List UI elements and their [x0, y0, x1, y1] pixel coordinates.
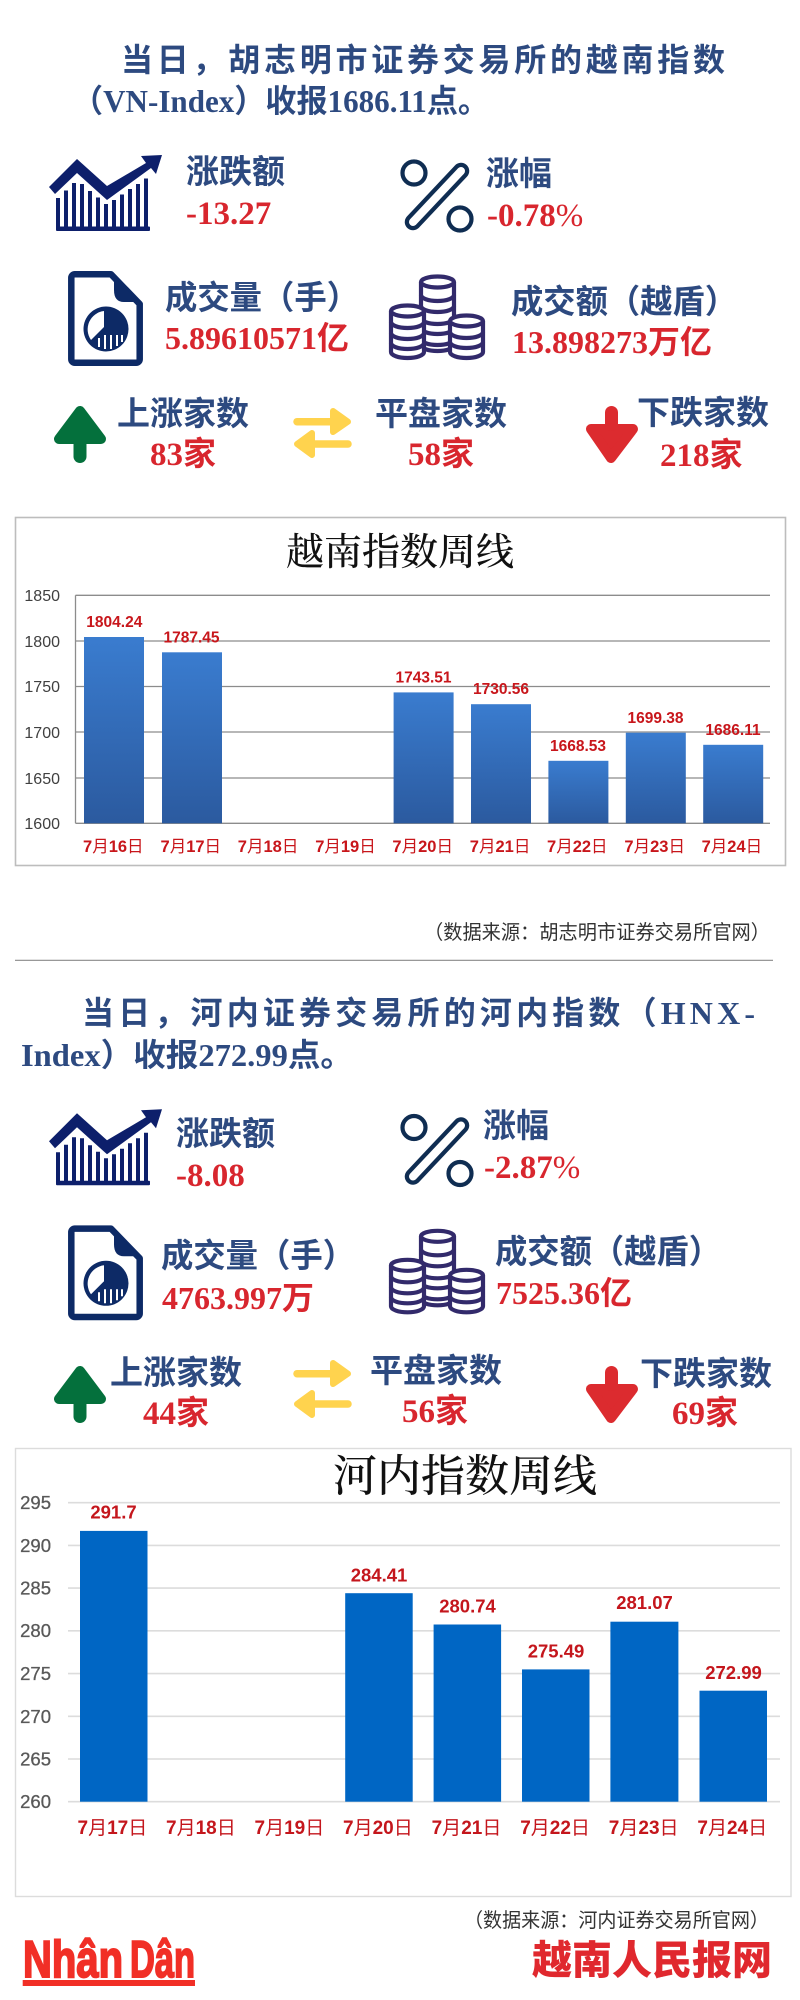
stat: turnover: 7525.36亿: [496, 1275, 632, 1311]
x axis date labels: 7月24日: [697, 1818, 767, 1839]
bar value labels: 284.41: [351, 1564, 407, 1586]
bar value labels: [90, 1502, 762, 1683]
bar value labels: 272.99: [705, 1662, 762, 1683]
y axis labels: 1700: [24, 725, 60, 742]
stat: change percent: 涨幅: [486, 156, 552, 193]
stat: advancing: [110, 1355, 242, 1432]
stat: volume: 4763.997万: [162, 1280, 314, 1316]
stat: change amount: 涨跌额: [176, 1116, 275, 1153]
source note: VN-Index: （数据来源：胡志明市证券交易所官网）: [424, 921, 770, 944]
x axis date labels: 7月22日: [547, 838, 608, 856]
icon: red down arrow: [591, 1366, 633, 1418]
bar value labels: 281.07: [616, 1592, 673, 1613]
section: VN-Index summary: [49, 42, 769, 474]
stat: change amount: 涨跌额: [186, 154, 285, 191]
x axis date labels: 7月23日: [624, 838, 685, 856]
logo: Nhan Dan: Dân: [130, 1931, 195, 1989]
stat: turnover: 成交额（越盾）: [495, 1234, 721, 1271]
icon: rising chart: [49, 155, 162, 231]
stat: change percent: [486, 156, 583, 234]
stat: unchanged: [370, 1353, 502, 1430]
x axis date labels: [83, 838, 762, 856]
x axis date labels: 7月23日: [609, 1818, 679, 1839]
bars: [80, 1531, 767, 1802]
bar value labels: 291.7: [90, 1502, 137, 1522]
y axis labels: 280: [20, 1620, 51, 1641]
stat: volume: 5.89610571亿: [165, 320, 349, 356]
x axis date labels: 7月22日: [520, 1818, 590, 1839]
heading: HNX-Index close: 当日，河内证券交易所的河内指数（HNX-: [82, 995, 755, 1031]
y axis labels: 285: [20, 1578, 51, 1598]
bar value labels: 280.74: [439, 1596, 496, 1616]
icon: coin stacks: [391, 1231, 483, 1312]
stat: advancing: 上涨家数: [110, 1355, 242, 1392]
stat: declining: [637, 395, 769, 474]
source note: HNX-Index: （数据来源：河内证券交易所官网）: [464, 1909, 769, 1932]
y axis labels: 1600: [24, 816, 60, 833]
icon: yellow exchange arrows: [297, 1363, 348, 1415]
x axis date labels: 7月20日: [392, 838, 453, 856]
stat: volume: 成交量（手）: [161, 1238, 355, 1275]
bars: [84, 637, 763, 823]
y axis labels: 260: [20, 1791, 51, 1812]
x axis date labels: 7月17日: [78, 1818, 147, 1839]
stat: declining: 下跌家数: [637, 395, 769, 432]
bar value labels: 1743.51: [395, 670, 452, 686]
bar value labels: 1699.38: [627, 710, 684, 727]
stat: declining: 69家: [672, 1395, 738, 1432]
stat: advancing: [117, 396, 249, 473]
stat: change amount: -13.27: [186, 196, 271, 232]
y axis labels: 290: [20, 1535, 51, 1556]
bar value labels: 1730.56: [473, 681, 529, 698]
x axis date labels: 7月16日: [83, 838, 144, 856]
icon: coin stacks: [391, 276, 483, 358]
panel: HNX-Index weekly bar chart: [16, 1448, 791, 1896]
stat: advancing: 上涨家数: [117, 396, 249, 433]
y axis labels: 1750: [24, 679, 60, 696]
bar value labels: 1686.11: [705, 722, 761, 739]
icon: document with pie chart: [71, 274, 140, 363]
stat: unchanged: 56家: [402, 1393, 468, 1430]
logo: Nhan Dan: Nhân: [23, 1931, 123, 1989]
stat: volume: [165, 280, 359, 356]
stat: declining: [640, 1356, 772, 1432]
x axis date labels: 7月17日: [160, 838, 221, 856]
x axis date labels: 7月21日: [432, 1818, 501, 1839]
stat: unchanged: 平盘家数: [370, 1353, 502, 1390]
icon: percent: [402, 162, 472, 230]
x axis date labels: 7月18日: [238, 838, 298, 856]
stat: declining: 218家: [660, 437, 742, 474]
stat: declining: 下跌家数: [640, 1356, 772, 1393]
y axis labels: 295: [20, 1492, 51, 1513]
y axis labels: 270: [20, 1706, 51, 1727]
icon: green up arrow: [59, 411, 101, 463]
bar value labels: 1804.24: [86, 614, 143, 631]
y axis labels: [20, 1492, 51, 1812]
x axis date labels: 7月20日: [343, 1818, 413, 1839]
bar value labels: 1668.53: [550, 738, 606, 755]
x axis date labels: 7月18日: [166, 1818, 236, 1839]
bar value labels: [86, 614, 761, 755]
stat: volume: 成交量（手）: [165, 280, 359, 317]
x axis date labels: 7月19日: [315, 838, 376, 856]
stat: turnover: 成交额（越盾）: [511, 284, 737, 321]
x axis date labels: 7月19日: [254, 1818, 324, 1839]
x axis date labels: [78, 1818, 767, 1839]
stat: turnover: 13.898273万亿: [512, 324, 712, 360]
chart title: 河内指数周线: [333, 1452, 597, 1501]
stat: turnover: [495, 1234, 721, 1311]
stat: advancing: 44家: [143, 1395, 209, 1432]
stat: change percent: [483, 1108, 580, 1186]
y axis labels: 265: [20, 1748, 51, 1770]
bar value labels: 1787.45: [163, 630, 220, 646]
heading: VN-Index close: 当日，胡志明市证券交易所的越南指数: [121, 42, 725, 78]
stat: unchanged: 平盘家数: [375, 396, 507, 433]
heading: VN-Index close: [72, 42, 725, 119]
stat: turnover: [511, 284, 737, 360]
stat: change amount: -8.08: [176, 1158, 245, 1194]
x axis date labels: 7月21日: [470, 838, 530, 856]
stat: unchanged: 58家: [408, 436, 474, 473]
stat: change amount: [186, 154, 285, 232]
heading: VN-Index close: （VN-Index）收报1686.11点。: [72, 83, 489, 119]
x axis date labels: 7月24日: [702, 838, 762, 856]
y axis labels: 1800: [24, 634, 60, 651]
chart title: 越南指数周线: [286, 532, 514, 574]
heading: HNX-Index close: Index）收报272.99点。: [21, 1037, 353, 1073]
y axis labels: [24, 588, 60, 833]
y axis labels: 1650: [24, 771, 60, 788]
stat: change percent: -2.87%: [484, 1150, 580, 1186]
section: HNX-Index summary: [21, 995, 772, 1432]
icon: green up arrow: [59, 1371, 101, 1423]
y axis labels: 1850: [24, 588, 60, 605]
stat: unchanged: [375, 396, 507, 473]
site name: Vietnam People's Daily Online: 越南人民报网: [532, 1939, 772, 1983]
stat: change percent: -0.78%: [487, 198, 583, 234]
icon: document with pie chart: [71, 1229, 140, 1317]
stat: advancing: 83家: [150, 436, 216, 473]
icon: percent: [402, 1116, 472, 1185]
stat: change amount: [176, 1116, 275, 1194]
stat: volume: [161, 1238, 355, 1316]
icon: red down arrow: [591, 406, 633, 458]
icon: yellow exchange arrows: [297, 411, 348, 455]
icon: rising chart: [49, 1109, 162, 1185]
stat: change percent: 涨幅: [483, 1108, 549, 1145]
heading: HNX-Index close: [21, 995, 755, 1073]
bar value labels: 275.49: [528, 1640, 584, 1662]
y axis labels: 275: [20, 1663, 51, 1684]
panel: VN-Index weekly bar chart: [16, 518, 786, 866]
